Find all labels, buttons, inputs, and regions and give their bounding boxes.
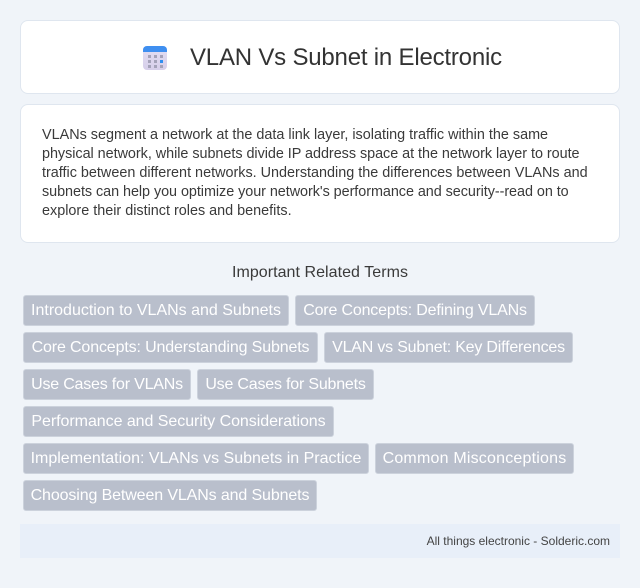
tag bbox=[324, 332, 573, 363]
tag: Core Concepts: Defining VLANs bbox=[303, 302, 527, 319]
tag bbox=[295, 295, 535, 326]
tag bbox=[23, 443, 369, 474]
panel: introduction text: explore their distinct roles and benefits. bbox=[42, 203, 292, 219]
tag bbox=[23, 332, 318, 363]
tag: Performance and Security Considerations bbox=[31, 413, 326, 430]
tag bbox=[197, 369, 374, 400]
title: VLAN Vs Subnet in Electronic bbox=[190, 44, 502, 71]
panel: introduction text: subnets can help you optimize your network's performance and security--read on to bbox=[42, 184, 569, 200]
tag bbox=[23, 406, 334, 437]
tag bbox=[375, 443, 574, 474]
panel: introduction text: physical network, while subnets divide IP address space at the network layer to route bbox=[42, 146, 580, 162]
tag: Implementation: VLANs vs Subnets in Practice bbox=[31, 450, 361, 467]
tag: Common Misconceptions bbox=[383, 450, 566, 467]
panel: introduction text bbox=[20, 104, 620, 243]
tag: VLAN vs Subnet: Key Differences bbox=[332, 339, 565, 356]
tag bbox=[23, 369, 191, 400]
title card bbox=[20, 20, 620, 94]
tag bbox=[23, 295, 289, 326]
panel: introduction text: VLANs segment a network at the data link layer, isolating traffic within the same bbox=[42, 127, 548, 143]
tag: Introduction to VLANs and Subnets bbox=[31, 302, 281, 319]
heading: important related terms: Important Related Terms bbox=[232, 264, 408, 281]
panel: introduction text: traffic between different networks. Understanding the differences between VLANs and bbox=[42, 165, 588, 181]
tag: Choosing Between VLANs and Subnets bbox=[31, 487, 309, 504]
icon: calendar bbox=[143, 46, 167, 70]
tag: Core Concepts: Understanding Subnets bbox=[32, 339, 309, 356]
tag: Use Cases for VLANs bbox=[31, 376, 183, 393]
tag bbox=[23, 480, 317, 511]
tag list bbox=[23, 295, 574, 511]
footer bbox=[20, 524, 620, 558]
footer credit: All things electronic - Solderic.com bbox=[427, 534, 610, 548]
tag: Use Cases for Subnets bbox=[205, 376, 366, 393]
